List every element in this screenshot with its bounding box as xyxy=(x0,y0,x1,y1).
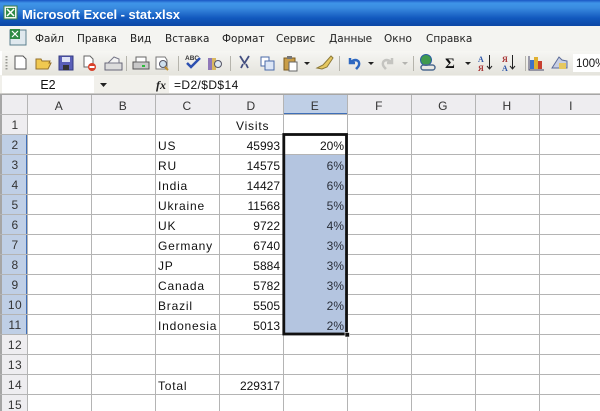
icon: sort descending: Я xyxy=(502,55,508,64)
title bar xyxy=(0,0,600,26)
column headers: C xyxy=(182,99,192,113)
dropdown arrow xyxy=(304,62,310,65)
icon: new xyxy=(15,56,26,69)
icon: sort descending: A xyxy=(502,64,508,73)
icon: undo xyxy=(350,58,359,69)
menu items: Вставка xyxy=(165,33,210,45)
zoom box xyxy=(573,54,600,72)
row headers: 4 xyxy=(11,178,19,192)
data table: Total xyxy=(158,379,187,393)
icon: print xyxy=(133,57,149,69)
row headers: 6 xyxy=(11,218,19,232)
icon: workbook xyxy=(10,29,26,45)
icon: permission xyxy=(84,56,96,71)
icon: spelling xyxy=(185,55,200,67)
row headers: 9 xyxy=(11,278,19,292)
icon: chart xyxy=(529,56,544,70)
column headers: A xyxy=(55,99,63,113)
data table: Canada xyxy=(158,279,205,293)
icon: copy xyxy=(261,57,274,70)
column headers xyxy=(0,94,600,114)
data table: 9722 xyxy=(253,219,280,233)
data table: 5782 xyxy=(253,279,280,293)
icon: sort ascending xyxy=(478,55,492,73)
icon: drawing xyxy=(552,57,567,69)
data table: 20% xyxy=(320,139,344,153)
data table: Indonesia xyxy=(158,319,217,333)
row headers: 1 xyxy=(11,118,19,132)
column headers: H xyxy=(502,99,512,113)
row headers: 5 xyxy=(11,198,19,212)
column headers: B xyxy=(119,99,127,113)
menu items xyxy=(35,33,472,45)
icon: redo xyxy=(383,58,392,69)
menu items: Справка xyxy=(426,33,472,45)
dropdown arrow xyxy=(465,62,471,65)
dropdown arrow xyxy=(402,62,408,65)
data table: 14427 xyxy=(247,179,280,193)
data table xyxy=(158,119,344,393)
row headers: 11 xyxy=(8,318,22,332)
selection fill xyxy=(285,155,345,333)
data table: 5884 xyxy=(253,259,280,273)
data table: 6740 xyxy=(253,239,280,253)
data table: 5013 xyxy=(253,319,280,333)
data table: Brazil xyxy=(158,299,193,313)
icon: cut xyxy=(240,56,249,68)
data table: UK xyxy=(158,219,176,233)
dropdown arrow xyxy=(368,62,374,65)
icon: paste xyxy=(284,56,297,71)
icon: format painter xyxy=(317,56,333,69)
data table: Germany xyxy=(158,239,213,253)
data table: 5% xyxy=(327,199,344,213)
column headers: F xyxy=(375,99,383,113)
menu items: Вид xyxy=(130,33,151,45)
icon: sum: Σ xyxy=(445,56,455,72)
icon: sort ascending: Я xyxy=(478,64,484,73)
data table: 5505 xyxy=(253,299,280,313)
data table: Visits xyxy=(236,119,269,133)
menu items: Формат xyxy=(222,33,265,45)
icon: hyperlink xyxy=(420,54,435,70)
icon: research xyxy=(208,58,222,70)
data table: 2% xyxy=(327,299,344,313)
toolbar xyxy=(2,51,600,76)
icon: sort descending xyxy=(502,55,515,73)
name box arrow xyxy=(100,83,107,87)
name box: E2 xyxy=(40,78,56,92)
formula input: =D2/$D$14 xyxy=(174,78,239,92)
icon: excel app xyxy=(4,6,17,19)
icon: fx: fx xyxy=(156,78,166,92)
data table: RU xyxy=(158,159,177,173)
row headers: 12 xyxy=(8,338,22,352)
data table: India xyxy=(158,179,188,193)
data table: 4% xyxy=(327,219,344,233)
row headers: 10 xyxy=(8,298,22,312)
data table: 229317 xyxy=(240,379,280,393)
row headers xyxy=(0,94,28,411)
data table: 3% xyxy=(327,279,344,293)
menu items: Окно xyxy=(384,33,412,45)
formula input xyxy=(169,76,600,93)
data table: 2% xyxy=(327,319,344,333)
menu items: Файл xyxy=(35,33,64,45)
column headers: D xyxy=(246,99,256,113)
data table: 45993 xyxy=(247,139,280,153)
window title: Microsoft Excel - stat.xlsx xyxy=(22,7,181,22)
row headers: 8 xyxy=(11,258,19,272)
data table: Ukraine xyxy=(158,199,205,213)
icon: preview xyxy=(156,57,168,70)
column headers: G xyxy=(438,99,448,113)
data table: 6% xyxy=(327,179,344,193)
column headers: E xyxy=(311,99,319,113)
data table: 3% xyxy=(327,259,344,273)
spreadsheet xyxy=(0,94,600,411)
row headers: 2 xyxy=(11,138,19,152)
data table: 11568 xyxy=(248,199,280,213)
row headers: 3 xyxy=(11,158,19,172)
data table: 3% xyxy=(327,239,344,253)
menu bar xyxy=(0,26,600,51)
selection border xyxy=(284,134,350,337)
icon: spelling: ABC xyxy=(185,55,199,62)
row headers: 7 xyxy=(11,238,19,252)
data table: 14575 xyxy=(247,159,280,173)
menu items: Данные xyxy=(329,33,372,45)
icon: save xyxy=(59,56,73,70)
formula bar xyxy=(0,75,600,94)
name box xyxy=(2,76,94,93)
menu items: Правка xyxy=(77,33,117,45)
data table: US xyxy=(158,139,176,153)
row headers: 13 xyxy=(8,358,22,372)
icon: open xyxy=(36,59,51,69)
data table: 6% xyxy=(327,159,344,173)
row headers: 14 xyxy=(8,378,22,392)
data table: JP xyxy=(158,259,174,273)
icon: sort ascending: A xyxy=(478,55,484,64)
icon: email xyxy=(105,57,122,70)
column headers: I xyxy=(569,99,573,113)
menu items: Сервис xyxy=(276,33,315,45)
